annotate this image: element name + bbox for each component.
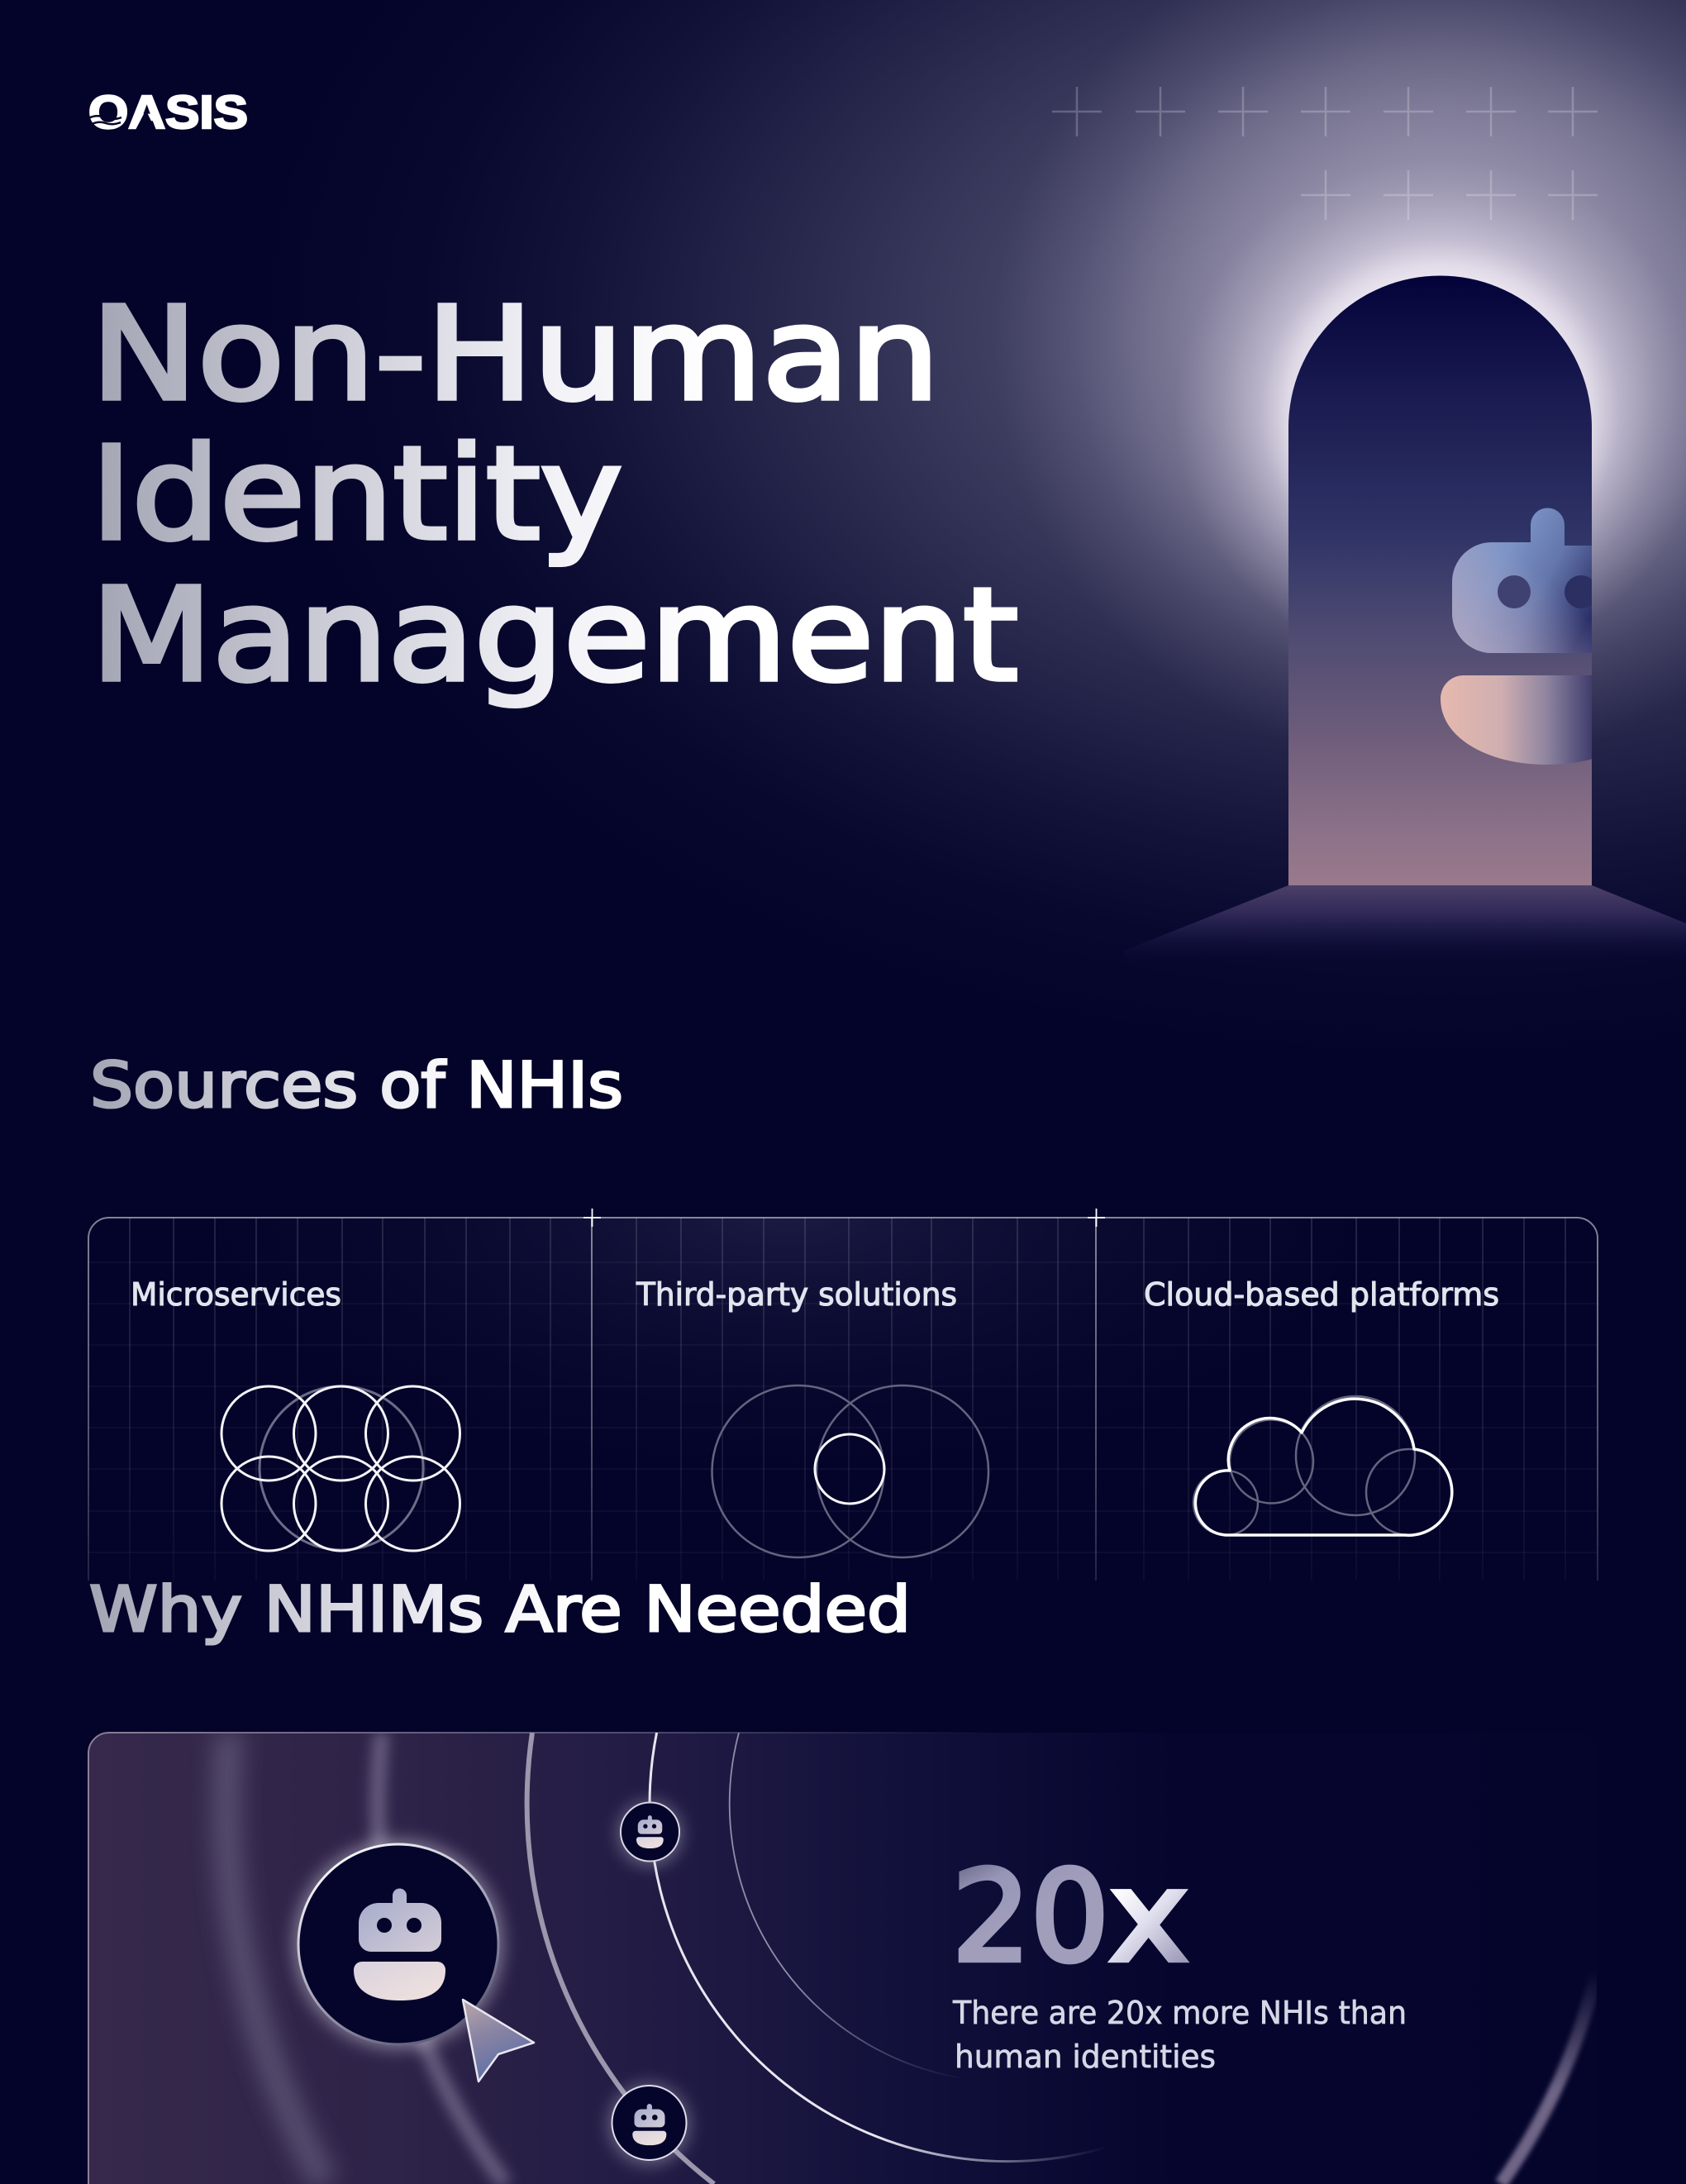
decorative plus-sign grid (1052, 87, 1598, 220)
icon: microservices circles (221, 1386, 460, 1551)
icon: third-party overlapping circles (712, 1385, 988, 1557)
small robot node 2 (610, 2085, 689, 2164)
card title: Third-party solutions: Third-party solutions (636, 1276, 957, 1313)
icon: cursor arrow (463, 2000, 534, 2081)
icon: cloud (1193, 1396, 1452, 1535)
stat description: human identities (955, 2039, 1216, 2075)
stat description: There are 20x more NHIs than (952, 1995, 1407, 2031)
panel: why NHIMs are needed (88, 1733, 1597, 2184)
small robot node 1 (618, 1802, 681, 1865)
doorway floor (1124, 885, 1686, 967)
card title: Microservices: Microservices (131, 1276, 341, 1313)
statistic: 20x: x (1109, 1844, 1188, 1990)
icon: robot peeking through doorway (1441, 508, 1592, 765)
statistic: 20x (952, 1844, 1188, 1990)
main robot node (294, 1840, 502, 2048)
hero glow background (241, 0, 1686, 1066)
main title (91, 279, 1018, 710)
card title: Cloud-based platforms: Cloud-based platforms (1144, 1276, 1499, 1313)
main title: Non-Human (91, 279, 940, 429)
statistic: 20x: 20 (952, 1844, 1109, 1990)
heading: Why NHIMs Are Needed: Why NHIMs Are Needed (89, 1572, 911, 1646)
concentric orbit rings (226, 1733, 1597, 2184)
panel: sources of NHIs (88, 1209, 1598, 1581)
main title: Management (91, 560, 1018, 710)
logo: OASIS: OASIS (88, 86, 248, 139)
doorway arch (1288, 276, 1592, 885)
stat description (952, 1995, 1407, 2075)
heading: Sources of NHIs: Sources of NHIs (90, 1048, 623, 1122)
main title: Identity (91, 419, 622, 569)
